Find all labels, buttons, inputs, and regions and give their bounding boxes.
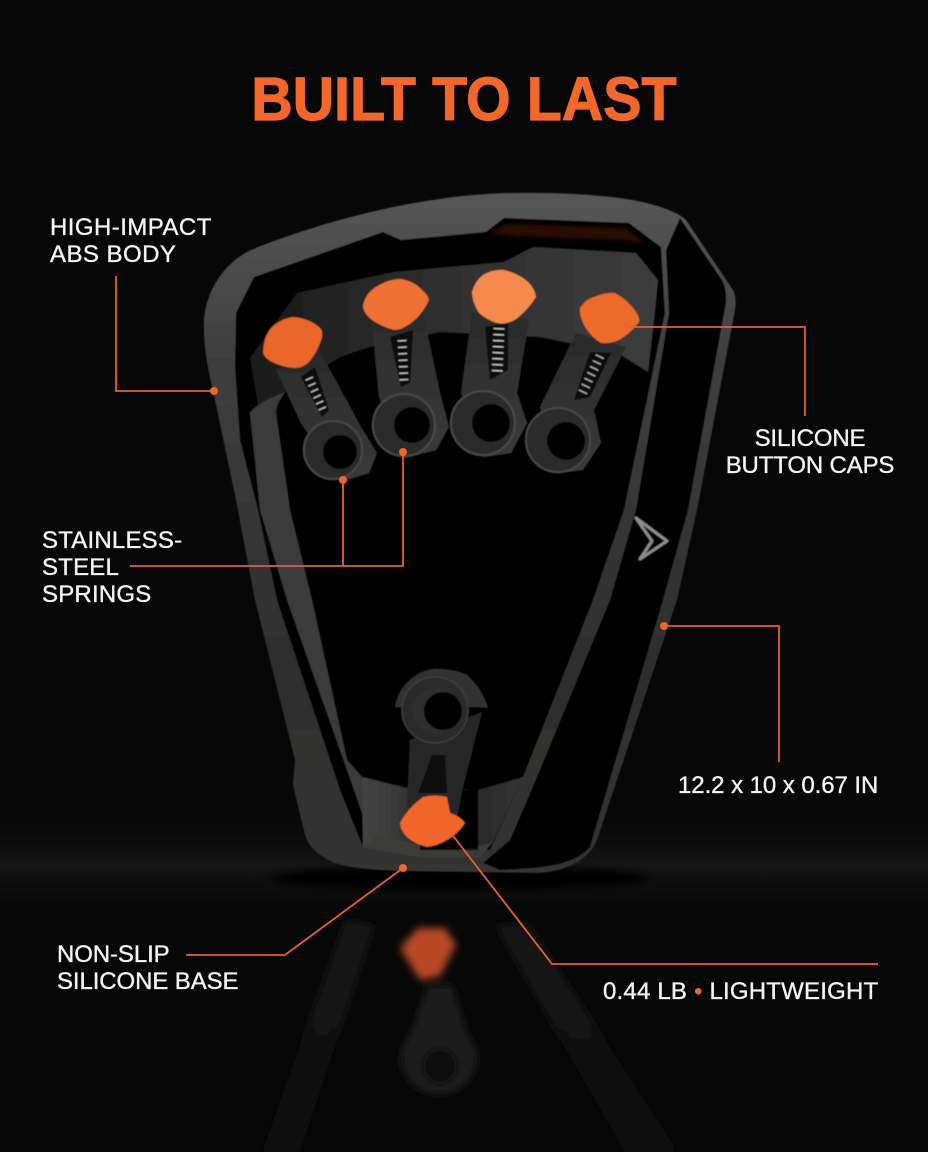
silicone cap 3 bbox=[472, 270, 536, 324]
label: weight: 0.44 LB • LIGHTWEIGHT bbox=[603, 978, 878, 1005]
label: button caps: BUTTON CAPS bbox=[726, 452, 894, 479]
label: button caps: SILICONE bbox=[755, 425, 865, 452]
logo chevron bbox=[636, 518, 667, 559]
device bbox=[204, 193, 736, 873]
floor reflection bbox=[262, 920, 678, 1152]
floor shadow bbox=[270, 866, 650, 890]
label: silicone base: SILICONE BASE bbox=[57, 968, 238, 995]
label: silicone base: NON-SLIP bbox=[57, 941, 170, 968]
label: abs body bbox=[50, 214, 212, 268]
button lever 4 bbox=[526, 293, 639, 473]
bottom lever bbox=[395, 669, 488, 847]
label: abs body: ABS BODY bbox=[50, 241, 176, 268]
button lever 2 bbox=[363, 279, 449, 458]
left inner band bbox=[250, 392, 378, 842]
label: springs bbox=[42, 527, 182, 608]
button lever 1 bbox=[263, 317, 377, 482]
inner opening bbox=[235, 218, 665, 850]
floor glow bbox=[0, 810, 928, 920]
abs body outer shell bbox=[204, 193, 736, 873]
silicone cap 4 bbox=[580, 293, 639, 343]
label: button caps bbox=[726, 425, 894, 479]
button lever 3 bbox=[451, 270, 536, 457]
callout dots bbox=[210, 323, 668, 872]
upper plate bbox=[250, 247, 658, 405]
label: springs: STEEL bbox=[42, 554, 119, 581]
label: springs: STAINLESS- bbox=[42, 527, 182, 554]
silicone cap 5 bbox=[400, 796, 465, 847]
label: springs: SPRINGS bbox=[42, 581, 151, 608]
lower base tray bbox=[362, 777, 523, 857]
callout lines bbox=[116, 276, 878, 964]
label: abs body: HIGH-IMPACT bbox=[50, 214, 212, 241]
right dark face bbox=[483, 218, 726, 870]
label: dimensions: 12.2 x 10 x 0.67 IN bbox=[678, 772, 878, 799]
silicone cap 1 bbox=[263, 317, 322, 368]
label: silicone base bbox=[57, 941, 238, 995]
red glow under top band bbox=[490, 224, 645, 244]
silicone cap 2 bbox=[363, 279, 429, 330]
title: BUILT TO LAST bbox=[251, 65, 677, 133]
